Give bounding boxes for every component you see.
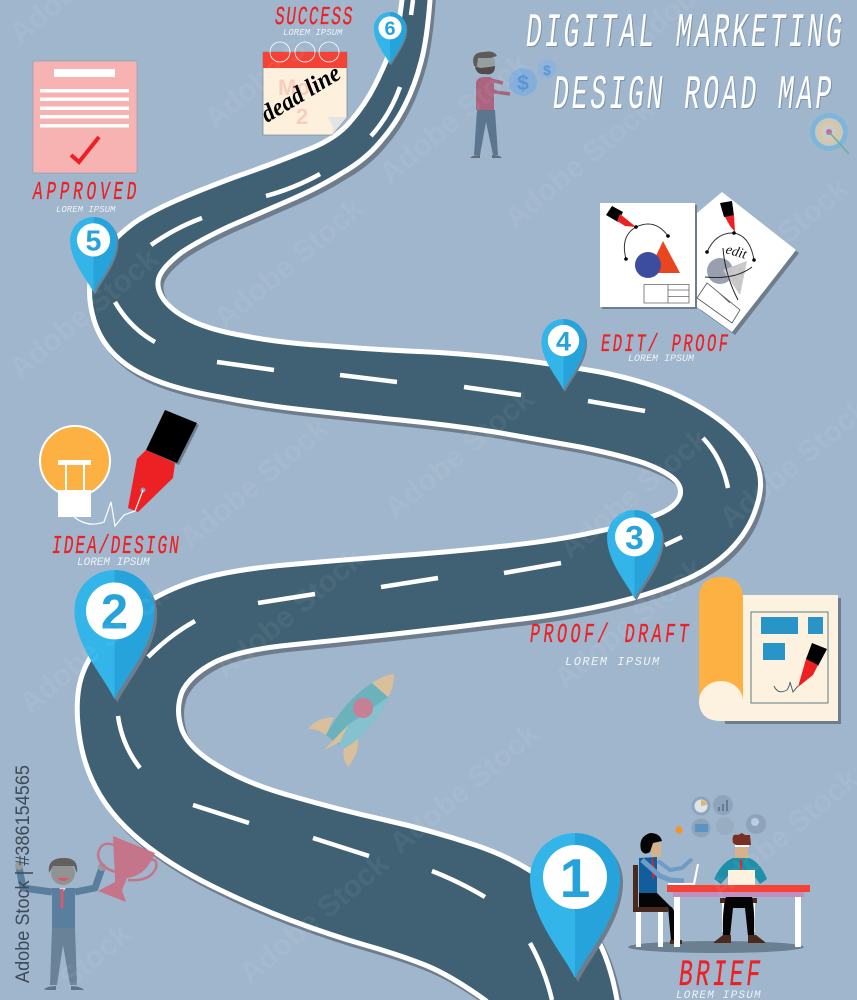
pin 4 — [541, 319, 587, 392]
pin 5 — [70, 217, 118, 294]
label: brief: BRIEF — [679, 955, 763, 997]
figure: man with coins: $ — [543, 62, 551, 78]
figure: man with trophy — [15, 836, 156, 990]
floor shadow — [628, 941, 804, 953]
pin 4: 4 — [556, 326, 571, 356]
stock watermark: Adobe Stock — [208, 542, 370, 685]
icon: deadline calendar: 2 — [296, 104, 308, 129]
panel: approved document: LOREM IPSUM — [56, 205, 116, 215]
stock watermark: Adobe Stock — [13, 577, 175, 720]
icon: light bulb — [40, 426, 110, 517]
icon: floating idea bubbles — [676, 795, 766, 838]
panel: proof draft: LOREM IPSUM — [565, 655, 661, 669]
panel: idea design — [40, 410, 199, 569]
table — [667, 885, 810, 947]
icon: trophy — [98, 836, 156, 902]
icon: pen tool — [74, 410, 199, 526]
panel: approved document — [32, 61, 140, 215]
pin 1 — [530, 833, 623, 982]
pin 1: 1 — [560, 847, 590, 909]
panel: brief meeting — [628, 795, 810, 1000]
icon: target — [810, 113, 849, 154]
stock watermark: Adobe Stock — [3, 242, 165, 385]
illustration: rocket — [308, 674, 394, 767]
pin 5: 5 — [86, 225, 102, 257]
figure: left person at laptop — [633, 833, 699, 947]
pin 6: 6 — [384, 18, 396, 40]
stock id credit: Adobe Stock | #386154565 — [13, 765, 34, 983]
title: DESIGN ROAD MAP — [553, 68, 834, 123]
stock watermark: Adobe Stock — [208, 192, 370, 335]
figure: right person with tablet — [714, 833, 767, 943]
panel: proof draft: PROOF/ DRAFT — [530, 619, 692, 650]
pin 2 — [74, 570, 157, 703]
panel: idea design: IDEA/DESIGN — [52, 533, 181, 561]
title: DIGITAL MARKETING — [526, 6, 845, 61]
panel: proof draft — [530, 577, 841, 724]
panel: idea design: LOREM IPSUM — [77, 557, 150, 569]
icon: rotated edit sheet — [697, 192, 799, 335]
icon: rotated edit sheet: edit — [724, 242, 749, 263]
stock watermark: Adobe Stock — [233, 847, 395, 990]
stock watermark: Adobe Stock — [373, 47, 535, 190]
stock watermark: Adobe Stock — [383, 717, 545, 860]
label: edit proof: LOREM IPSUM — [628, 354, 695, 365]
stock watermark: Adobe Stock — [548, 552, 710, 695]
panel: success calendar: SUCCESS — [275, 4, 354, 32]
pin 3 — [607, 510, 664, 601]
icon: deadline calendar: Mo — [278, 75, 310, 100]
pin 6 — [374, 12, 407, 66]
label: edit proof: EDIT/ PROOF — [601, 332, 731, 359]
figure: man with coins: $ — [517, 72, 529, 95]
figure: man with coins — [470, 52, 556, 158]
stock watermark: Adobe Stock — [553, 422, 715, 565]
stock watermark: Adobe Stock — [693, 172, 855, 315]
pin 3: 3 — [625, 520, 644, 557]
icon: deadline calendar: dead line — [256, 60, 346, 128]
pin 2: 2 — [101, 586, 128, 640]
stock watermark: Adobe Stock — [498, 92, 660, 235]
stock watermark: Adobe Stock — [378, 382, 540, 525]
stock watermark: Stock — [53, 917, 137, 995]
icon: blueprint scroll — [699, 577, 841, 724]
panel: success calendar: LOREM IPSUM — [283, 28, 343, 38]
panel: approved document: APPROVED — [32, 179, 140, 207]
stock watermark: Adobe Stock — [173, 412, 335, 555]
icon: upright proof sheet — [600, 203, 697, 309]
title — [526, 6, 845, 123]
panel: success calendar — [256, 4, 354, 135]
panel: edit proof sheets — [600, 192, 799, 365]
